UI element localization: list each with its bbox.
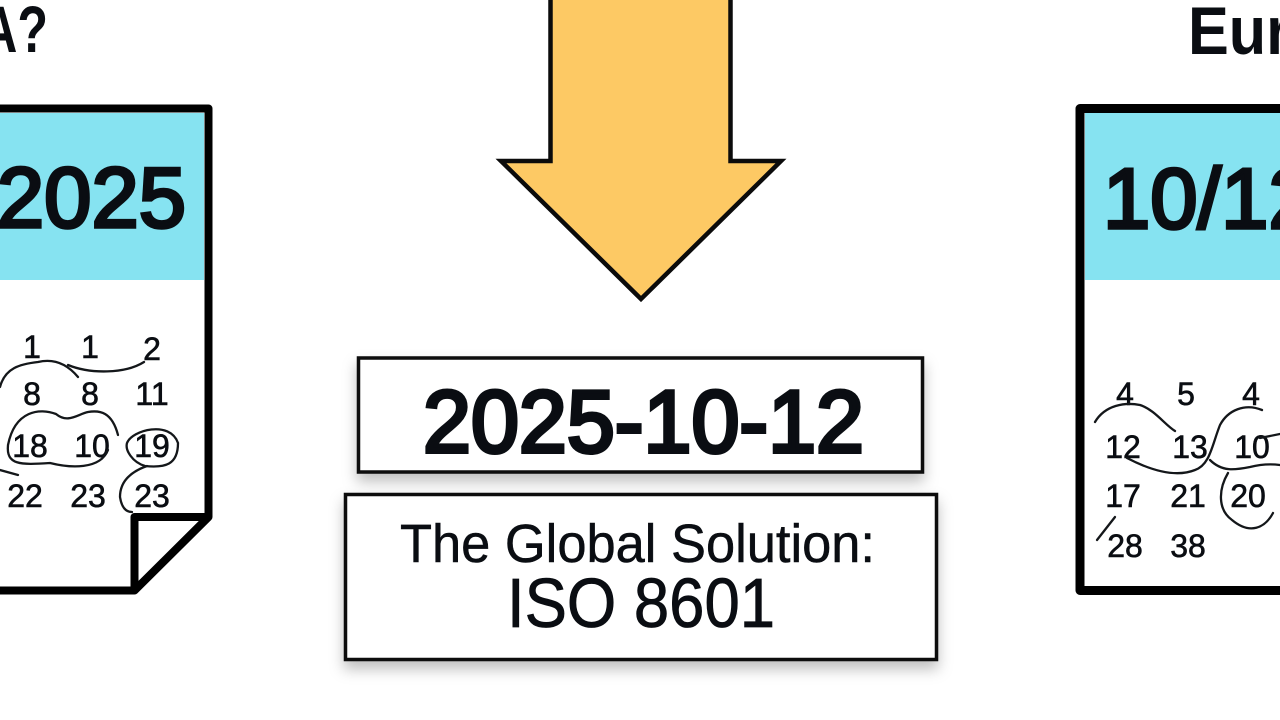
box frame: [358, 358, 922, 472]
calendar header band: [1085, 113, 1280, 280]
calendar day numbers: [1105, 376, 1270, 564]
ISO date value: 2025-10-12: [423, 372, 864, 471]
calendar day numbers: 2: [143, 331, 161, 367]
calendar day numbers: 8: [81, 376, 99, 412]
calendar day numbers: 19: [134, 428, 170, 464]
hand-drawn circles on right calendar: [1095, 404, 1280, 540]
calendar day numbers: 12: [1105, 429, 1141, 465]
arrow: down to ISO 8601: [501, 0, 781, 299]
calendar day numbers: 4: [1242, 376, 1260, 412]
calendar page outline with folded corner: [0, 108, 208, 590]
hand-drawn circles on left calendar: [0, 361, 178, 512]
calendar day numbers: 28: [1107, 528, 1143, 564]
calendar day numbers: 21: [1170, 478, 1206, 514]
calendar day numbers: 22: [7, 478, 43, 514]
calendar day numbers: 20: [1230, 478, 1266, 514]
calendar day numbers: 10: [74, 428, 110, 464]
calendar page outline: [1080, 108, 1280, 590]
box frame: [346, 494, 936, 660]
calendar day numbers: 10: [1234, 429, 1270, 465]
panel: right calendar Europe: [1080, 108, 1280, 590]
calendar day numbers: 1: [81, 329, 99, 365]
calendar day numbers: 38: [1170, 528, 1206, 564]
calendar day numbers: 17: [1105, 478, 1141, 514]
panel: ISO date box: [358, 358, 922, 472]
calendar day numbers: 8: [23, 376, 41, 412]
calendar header band: [0, 113, 204, 280]
panel: global solution box: [346, 494, 936, 660]
calendar day numbers: 23: [70, 478, 106, 514]
calendar day numbers: 1: [23, 329, 41, 365]
calendar day numbers: 4: [1116, 376, 1134, 412]
calendar day numbers: 23: [134, 478, 170, 514]
panel: left calendar USA: [0, 108, 208, 590]
calendar day numbers: [7, 329, 170, 514]
calendar day numbers: 18: [12, 428, 48, 464]
calendar day numbers: 5: [1177, 376, 1195, 412]
standard name: ISO 8601: [507, 564, 775, 642]
calendar day numbers: 13: [1172, 429, 1208, 465]
calendar day numbers: 11: [135, 376, 169, 412]
solution label: The Global Solution:: [400, 514, 875, 574]
